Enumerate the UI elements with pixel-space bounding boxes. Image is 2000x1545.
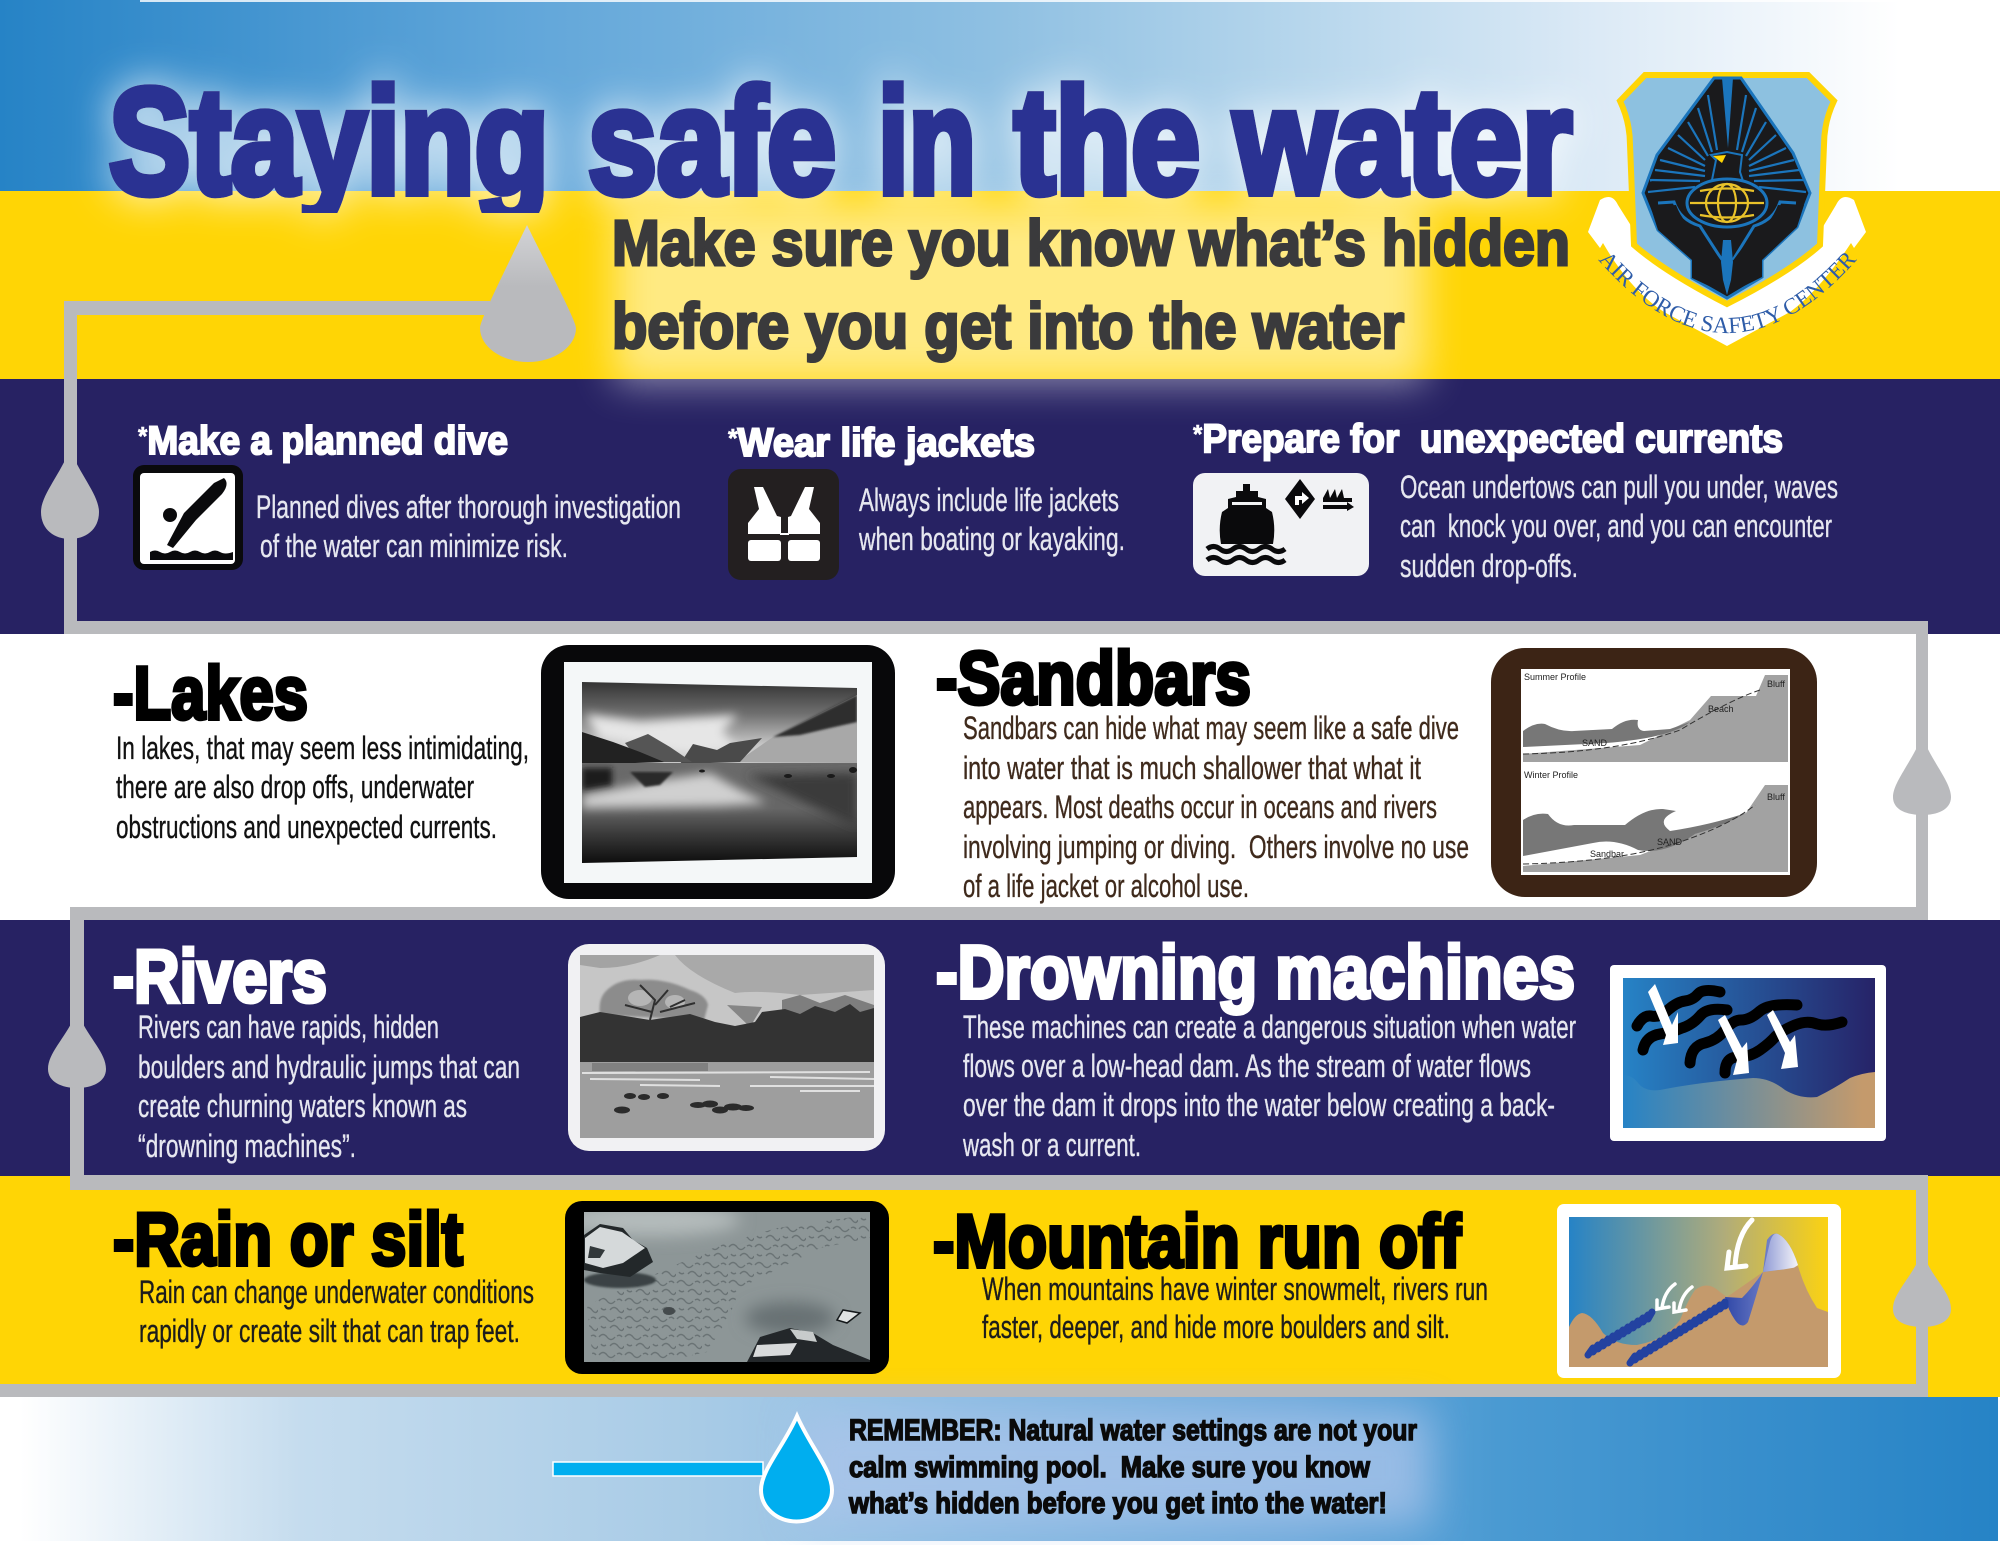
panel: safety tips (133, 417, 1838, 584)
heading: rivers: -Rivers (113, 934, 327, 1018)
photo: silt in water (560, 1201, 889, 1374)
pipe segments (0, 301, 1928, 1397)
subtitle: Make sure you know what’s hidden (612, 207, 1570, 279)
icon: life jacket (728, 469, 839, 580)
tip: wear life jackets: Wear life jackets (738, 421, 1035, 465)
text: sandbars: into water that is much shallower that what it (963, 750, 1421, 786)
icon: diver (133, 465, 243, 570)
text: remember: REMEMBER: Natural water settings are not your (849, 1414, 1417, 1447)
tip: prepare for unexpected currents: Prepare for unexpected currents (1202, 417, 1783, 461)
illustration: low-head dam (1610, 965, 1886, 1141)
drop: left upper (41, 449, 99, 539)
title: water (1233, 57, 1572, 225)
winter profile (1523, 770, 1788, 872)
panel: page header (0, 0, 2000, 634)
text: rivers: create churning waters known as (138, 1088, 467, 1124)
icon: ship and current signs (1193, 473, 1369, 576)
grey pipeline connecting the sections (0, 225, 1951, 1397)
heading: lakes: -Lakes (113, 651, 308, 735)
text: rain or silt (139, 1274, 534, 1349)
text: drowning machines: These machines can create a dangerous situation when water (963, 1009, 1576, 1045)
illustration: mountain run off (1557, 1204, 1841, 1378)
text: mountain run off: When mountains have winter snowmelt, rivers run (982, 1271, 1488, 1307)
text: sandbars: appears. Most deaths occur in oceans and rivers (963, 789, 1437, 825)
tip: wear life jackets: Always include life jackets (859, 482, 1119, 518)
text: lakes: obstructions and unexpected currents. (116, 809, 497, 845)
title (109, 57, 1572, 225)
text: rivers (138, 1009, 520, 1164)
photo: river with ducks (568, 944, 885, 1151)
text: mountain run off: faster, deeper, and hide more boulders and silt. (982, 1309, 1450, 1345)
icon: blue water drop with pipe (553, 1416, 832, 1521)
text: rain or silt: Rain can change underwater conditions (139, 1274, 534, 1310)
text: rivers: boulders and hydraulic jumps that can (138, 1049, 520, 1085)
panel: rain and mountain run off (0, 1176, 2000, 1397)
text: lakes: In lakes, that may seem less intimidating, (116, 730, 529, 766)
drop: right upper (1893, 736, 1951, 815)
text: mountain run off (982, 1271, 1488, 1345)
title: safe (588, 57, 836, 225)
winter profile: Bluff (1767, 792, 1785, 802)
subtitle (612, 207, 1570, 362)
text: rivers: “drowning machines”. (138, 1128, 356, 1164)
tip: wear life jackets: when boating or kayaking. (858, 521, 1125, 557)
drop: left lower (48, 1011, 106, 1088)
heading: mountain run off: -Mountain run off (933, 1199, 1462, 1283)
tip: wear life jackets: * (728, 423, 738, 453)
panel: rivers and drowning machines (0, 920, 2000, 1176)
title: Staying (109, 57, 549, 225)
text: sandbars: Sandbars can hide what may seem like a safe dive (963, 710, 1459, 746)
tip: wear life jackets (728, 421, 1125, 580)
text: drowning machines (962, 1009, 1576, 1163)
summer profile: Summer Profile (1524, 672, 1586, 682)
summer profile: Beach (1708, 704, 1734, 714)
summer profile: SAND (1582, 738, 1608, 748)
text: drowning machines: wash or a current. (962, 1127, 1141, 1163)
text: sandbars: involving jumping or diving. Others involve no use (963, 829, 1469, 865)
text: drowning machines: flows over a low-head dam. As the stream of water flows (963, 1048, 1531, 1084)
heading: drowning machines: -Drowning machines (936, 930, 1575, 1014)
panel: remember footer (0, 1397, 1998, 1541)
text: lakes (116, 730, 529, 845)
title: the (1014, 57, 1200, 225)
summer profile: Bluff (1767, 679, 1785, 689)
tip: make a planned dive: Make a planned dive (147, 419, 508, 463)
drop: top (480, 225, 576, 362)
emblem: Air Force Safety Center shield (1588, 72, 1866, 346)
winter profile: Winter Profile (1524, 770, 1578, 780)
tip: make a planned dive (133, 419, 681, 570)
tip: make a planned dive: Planned dives after thorough investigation (256, 489, 681, 525)
text: lakes: there are also drop offs, underwater (116, 769, 474, 805)
tip: make a planned dive: * (138, 421, 148, 451)
tip: prepare for unexpected currents: sudden drop-offs. (1400, 548, 1578, 584)
summer profile (1523, 672, 1788, 762)
text: remember: calm swimming pool. Make sure you know (849, 1451, 1371, 1484)
text: rain or silt: rapidly or create silt that can trap feet. (139, 1313, 520, 1349)
text: remember (848, 1414, 1417, 1520)
panel: lakes and sandbars (114, 645, 1817, 904)
heading: rain or silt: -Rain or silt (113, 1197, 463, 1281)
tip: prepare for unexpected currents (1193, 417, 1838, 584)
text: sandbars (963, 710, 1469, 904)
text: drowning machines: over the dam it drops into the water below creating a back- (963, 1087, 1555, 1123)
drop: right lower (1893, 1252, 1951, 1327)
tip: make a planned dive: of the water can minimize risk. (260, 528, 568, 564)
heading: sandbars: -Sandbars (936, 636, 1251, 720)
subtitle: before you get into the water (612, 290, 1404, 362)
emblem: Air Force Safety Center shield: AIR FORCE SAFETY CENTER (1598, 253, 1857, 334)
winter profile: Sandbar (1590, 849, 1624, 859)
title: in (878, 57, 976, 225)
text: remember: what’s hidden before you get into the water! (848, 1487, 1387, 1520)
tip: prepare for unexpected currents: * (1193, 419, 1203, 449)
diagram: sandbar profiles (1491, 648, 1817, 897)
winter profile: SAND (1657, 837, 1683, 847)
text: rivers: Rivers can have rapids, hidden (138, 1009, 439, 1045)
text: sandbars: of a life jacket or alcohol use. (963, 868, 1249, 904)
photo: lake (541, 645, 895, 899)
